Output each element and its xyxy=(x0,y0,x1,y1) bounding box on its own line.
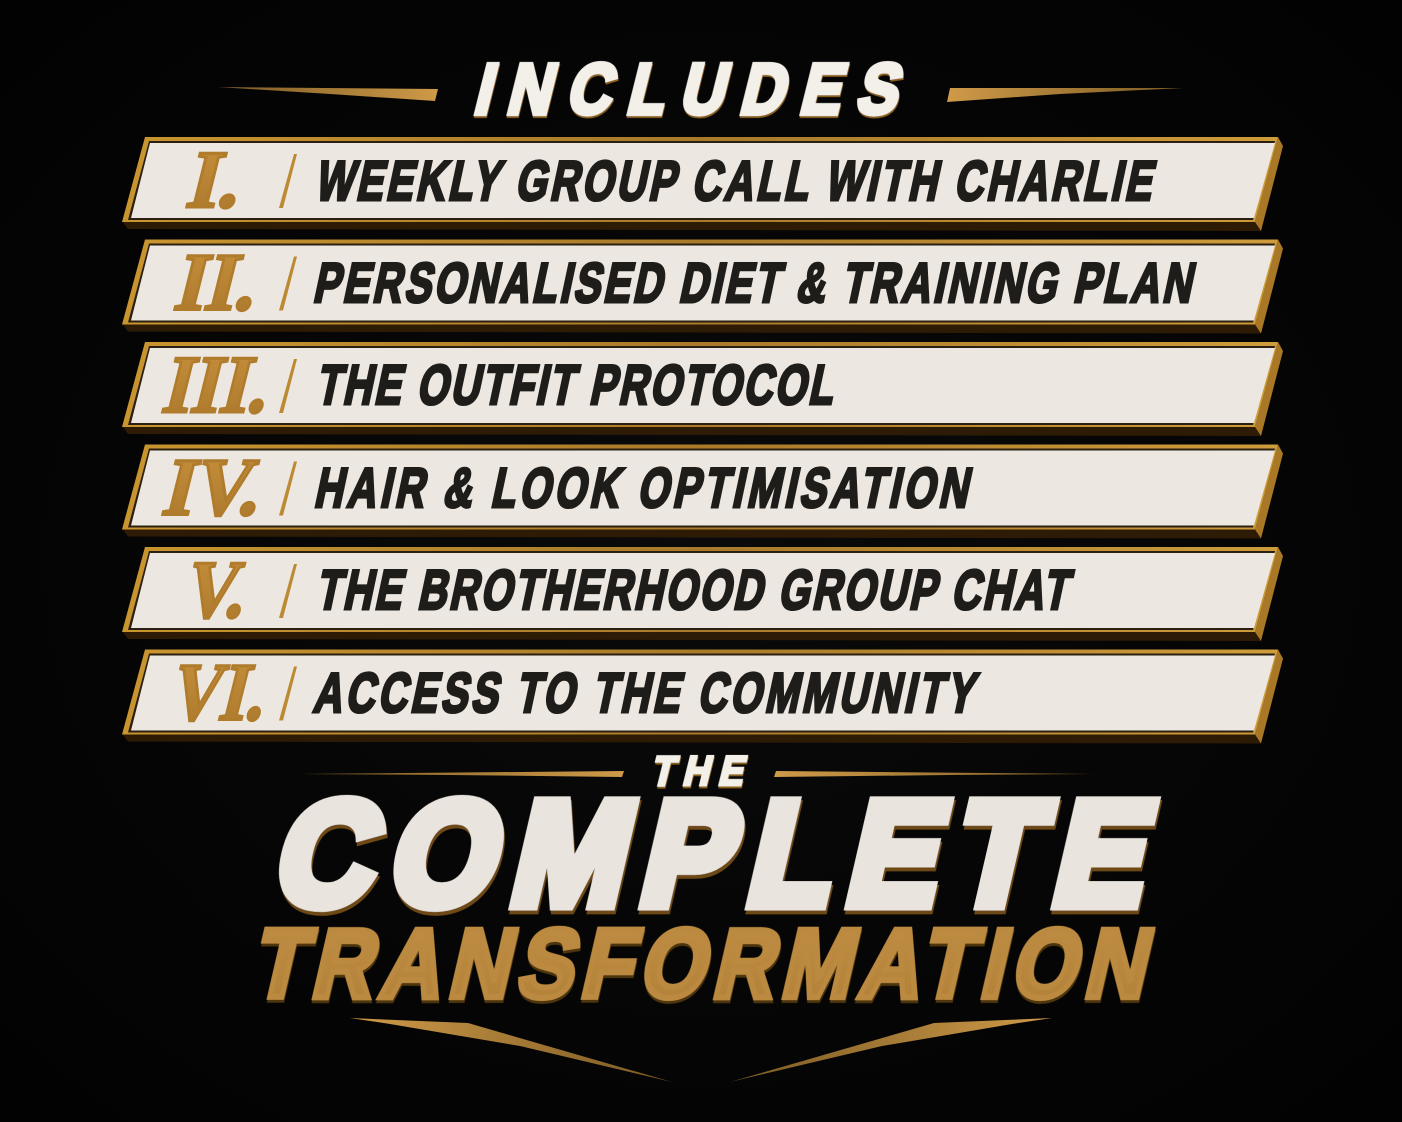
title: the complete transformation xyxy=(245,749,1169,1082)
banner 1 xyxy=(122,135,1283,231)
banner plate xyxy=(122,137,1283,231)
item text: HAIR & LOOK OPTIMISATION xyxy=(310,457,977,519)
divider xyxy=(279,666,297,720)
divider xyxy=(279,462,297,516)
numeral: VI. xyxy=(162,648,279,738)
item text: THE OUTFIT PROTOCOL xyxy=(312,354,843,416)
item text: WEEKLY GROUP CALL WITH CHARLIE xyxy=(311,150,1161,212)
banner plate xyxy=(122,342,1283,436)
heading text: INCLUDES xyxy=(468,50,911,129)
banner 3 xyxy=(122,340,1283,436)
banner plate xyxy=(122,240,1283,334)
numeral: III. xyxy=(155,340,282,431)
numeral: I. xyxy=(179,135,254,226)
banner plate xyxy=(122,547,1283,641)
left bottom flourish xyxy=(350,1018,672,1082)
complete: COMPLETE xyxy=(263,772,1169,936)
item text: ACCESS TO THE COMMUNITY xyxy=(309,662,983,724)
right rule beside the xyxy=(774,771,1094,777)
item text: PERSONALISED DIET & TRAINING PLAN xyxy=(309,252,1201,314)
banner 4 xyxy=(122,443,1283,538)
heading: includes xyxy=(218,50,1183,129)
banner 2 xyxy=(122,238,1283,334)
transformation: TRANSFORMATION xyxy=(245,908,1163,1018)
banner plate xyxy=(122,650,1283,744)
divider xyxy=(279,359,297,413)
right bottom flourish xyxy=(730,1018,1052,1082)
left rule beside the xyxy=(298,771,624,777)
left heading rule xyxy=(218,87,438,101)
divider xyxy=(279,564,297,618)
numeral: V. xyxy=(176,545,259,636)
item text: THE BROTHERHOOD GROUP CHAT xyxy=(312,559,1077,621)
divider xyxy=(279,256,297,310)
banner plate xyxy=(122,444,1283,538)
numeral: II. xyxy=(167,238,270,328)
numeral: IV. xyxy=(155,443,274,533)
right heading rule xyxy=(947,88,1183,102)
banner 6 xyxy=(122,648,1283,744)
the: THE xyxy=(648,749,751,794)
divider xyxy=(279,154,297,208)
banner 5 xyxy=(122,545,1283,641)
